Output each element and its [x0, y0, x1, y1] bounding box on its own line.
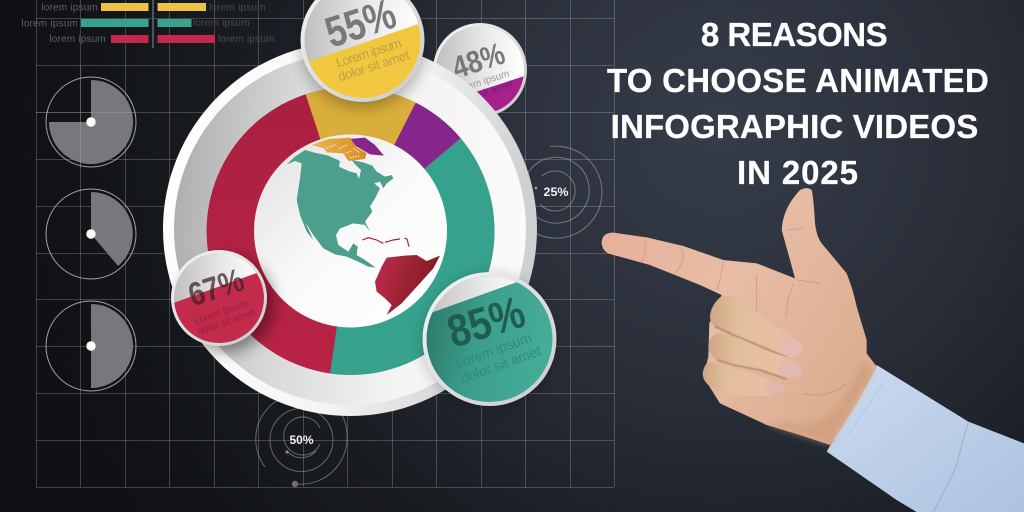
gauge: forty percent: [46, 189, 136, 279]
hand pointing left: [602, 188, 1024, 512]
bubble: 67%: dolor sit amet: [196, 307, 256, 338]
greenland: [348, 138, 384, 156]
bar chart: lorem ipsum: lorem ipsum: [41, 2, 98, 14]
shirt cuff: [827, 365, 1024, 512]
palm and index finger: [602, 188, 877, 445]
bar chart: lorem ipsum: lorem ipsum: [209, 2, 266, 14]
arctic islands: [312, 138, 367, 161]
bubble: 67%: Lorem ipsum: [193, 298, 249, 327]
bubble: 55%: Lorem ipsum: [334, 35, 403, 70]
bubble: 67%: [165, 250, 274, 352]
bubble: 55%: [290, 0, 430, 110]
title: [607, 16, 989, 191]
donut chart: [206, 89, 494, 375]
background grid: [36, 0, 614, 488]
bubble: 67%: 67%: [184, 261, 248, 313]
south america: [375, 255, 440, 315]
globe: [254, 134, 447, 328]
bubble: 55%: dolor sit amet: [336, 47, 411, 84]
gauge: half: [46, 301, 136, 391]
title line 1: 8 REASONS: [701, 16, 887, 53]
bubble: 85%: dolor sit amet: [459, 342, 543, 386]
finger: ring: [708, 333, 803, 379]
bar chart: lorem ipsum: [21, 0, 275, 48]
bar chart: lorem ipsum: lorem ipsum: [218, 34, 275, 45]
nail: [777, 360, 803, 379]
title line 3: INFOGRAPHIC VIDEOS: [611, 108, 978, 145]
finger: little: [703, 362, 785, 396]
segment: purple: [394, 102, 460, 169]
north america: [287, 150, 393, 268]
bubble: 48%: Lorem ipsum: [453, 68, 511, 97]
bubble: 48%: dolor sit amet: [454, 79, 515, 108]
finger: middle: [710, 296, 805, 359]
palm creases: [642, 228, 847, 395]
bubble: 85%: 85%: [441, 286, 531, 357]
radial gauge: 50%: [256, 393, 347, 487]
bubble: 85%: [422, 270, 556, 408]
title line 2: TO CHOOSE ANIMATED: [607, 62, 989, 99]
nail: [777, 335, 805, 359]
bar chart: lorem ipsum: lorem ipsum: [193, 18, 250, 29]
bubble: 85%: Lorem ipsum: [453, 329, 534, 371]
caribbean islands: [362, 238, 409, 247]
radial gauge: 25%: 25%: [544, 187, 568, 199]
nail: [767, 382, 785, 394]
bubble: 48%: [434, 23, 527, 114]
bar chart: lorem ipsum: lorem ipsum: [49, 34, 106, 45]
radial gauge: 50%: 50%: [290, 435, 314, 447]
title line 4: IN 2025: [737, 154, 859, 191]
bar chart: lorem ipsum: lorem ipsum: [21, 18, 78, 30]
segment: teal: [330, 138, 494, 375]
bubble: 48%: 48%: [448, 36, 509, 85]
palm shading: [767, 360, 873, 445]
gauge: three quarters: [36, 66, 136, 168]
segment: gold: [306, 89, 416, 145]
main disc: [163, 42, 537, 416]
radial gauge: 25%: [528, 146, 602, 238]
